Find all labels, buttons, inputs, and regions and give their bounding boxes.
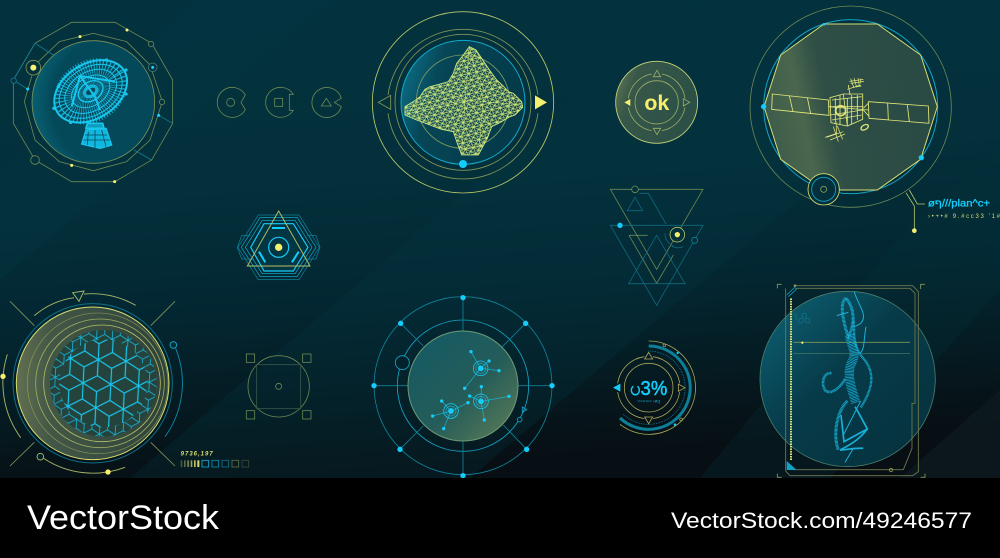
satellite body bbox=[830, 94, 863, 126]
hex emblem bbox=[796, 313, 810, 323]
hexagon badge bbox=[237, 211, 320, 280]
ok label: ok bbox=[644, 91, 669, 115]
satellite panel bbox=[750, 6, 1000, 233]
gauge dots bbox=[663, 344, 682, 426]
mountain wireframe panel bbox=[372, 12, 554, 193]
percentage caption: »»«∞≈ ıᴎq bbox=[637, 399, 660, 404]
callout heading: øף///plan^c+ bbox=[928, 199, 990, 210]
tech frame bbox=[777, 284, 925, 477]
central disc bbox=[401, 40, 525, 164]
yellow triangle bbox=[247, 211, 310, 266]
square target icon bbox=[246, 354, 311, 419]
dish rim nodes bbox=[52, 58, 128, 124]
olive disc bbox=[16, 307, 169, 460]
yellow and blue frame markers bbox=[11, 28, 165, 183]
rhombus wireframe sphere bbox=[50, 330, 157, 437]
inner hexagon bbox=[251, 224, 308, 271]
percentage value: ပ3% bbox=[630, 378, 668, 400]
left solar panel bbox=[772, 94, 829, 115]
OK dial bbox=[616, 61, 698, 143]
blue ring bbox=[764, 20, 938, 194]
arrows bbox=[613, 352, 685, 424]
watermark footer bbox=[0, 478, 1000, 558]
nested hexagons bbox=[238, 215, 319, 280]
dark sphere bbox=[50, 330, 157, 437]
percentage gauge bbox=[613, 341, 696, 434]
left arrow bbox=[378, 95, 391, 109]
inner ring bbox=[635, 81, 678, 124]
wireframe mountain bbox=[405, 47, 523, 155]
core dot bbox=[275, 244, 282, 251]
inner ring bbox=[624, 363, 673, 412]
bottom target bbox=[808, 174, 839, 205]
disc bbox=[32, 41, 155, 163]
inner rings bbox=[27, 313, 168, 454]
blue triangles bbox=[610, 193, 703, 305]
antenna grids bbox=[847, 78, 864, 89]
outer nodes bbox=[371, 295, 555, 478]
ring ornaments bbox=[395, 356, 527, 422]
bottom dot bbox=[459, 160, 467, 168]
icon: notched square bbox=[266, 87, 293, 117]
scale bar bbox=[788, 298, 794, 460]
blue frame accents bbox=[13, 43, 173, 160]
triangle marker bbox=[73, 291, 84, 301]
blue thick arc bbox=[620, 346, 690, 429]
callout caption: ›•+•# 9.#cc33 '1# bbox=[928, 214, 1000, 220]
outer yellow arcs bbox=[618, 341, 696, 434]
guide marker bbox=[801, 341, 803, 344]
outer ring bbox=[750, 6, 951, 207]
sphere backdrop bbox=[760, 291, 935, 467]
sphere panel bbox=[0, 291, 311, 475]
yellow triangles bbox=[610, 189, 703, 283]
parabolic dish wireframe bbox=[43, 47, 139, 135]
blue ring bbox=[13, 304, 172, 463]
outer polygon frame bbox=[13, 22, 173, 182]
network globe panel bbox=[371, 295, 555, 478]
horizontal guide lines bbox=[793, 341, 910, 344]
ring markers bbox=[0, 342, 177, 475]
segmented ring bbox=[628, 74, 685, 131]
side hexagons bbox=[237, 236, 320, 259]
constellation graph bbox=[431, 350, 511, 430]
dial disc bbox=[616, 61, 698, 143]
icon: notched circle bbox=[217, 87, 245, 117]
dotted arc bbox=[623, 351, 685, 424]
icon: notched triangle bbox=[312, 87, 341, 117]
blue markers bbox=[761, 23, 924, 160]
readout label: 9736,197 bbox=[181, 451, 213, 457]
DNA strand panel bbox=[760, 284, 935, 477]
cyan bars bbox=[259, 228, 299, 262]
brand name: VectorStock bbox=[27, 499, 220, 537]
readout bars bbox=[181, 460, 249, 467]
target marker bbox=[617, 186, 698, 243]
helix strands bbox=[823, 292, 871, 462]
dish pedestal bbox=[82, 123, 112, 148]
small notched icons row bbox=[217, 87, 341, 117]
image reference: VectorStock.com/49246577 bbox=[671, 508, 972, 533]
radar dish panel bbox=[11, 22, 173, 183]
satellite drawing bbox=[772, 78, 929, 142]
spokes bbox=[374, 298, 552, 476]
outer ring bbox=[374, 297, 552, 475]
inner ring bbox=[416, 55, 510, 148]
right solar panel bbox=[868, 102, 929, 123]
triangle composition bbox=[610, 186, 703, 305]
core bbox=[269, 237, 289, 257]
corner tick lines bbox=[10, 301, 175, 466]
corner accents bbox=[787, 284, 893, 472]
callout leader bbox=[906, 190, 925, 233]
dish feed struts bbox=[72, 76, 115, 110]
middle polygon frame bbox=[24, 33, 162, 171]
right arrow bbox=[535, 95, 547, 109]
direction arrows bbox=[624, 70, 690, 135]
outer arcs bbox=[3, 294, 182, 473]
globe bbox=[408, 331, 518, 441]
concentric rings bbox=[372, 12, 554, 193]
middle ring bbox=[397, 320, 529, 451]
decagon shield bbox=[764, 24, 937, 190]
